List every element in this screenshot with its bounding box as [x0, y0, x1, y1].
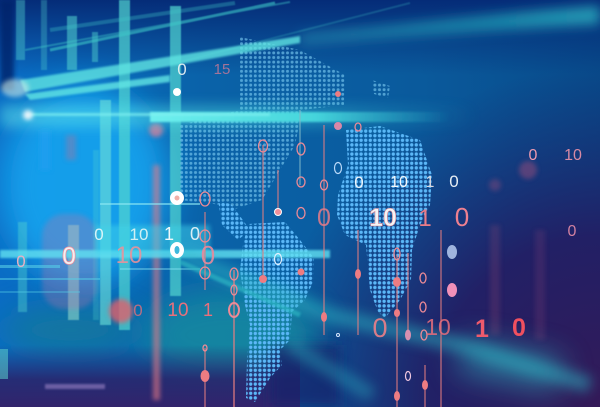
diagonal rack lines — [25, 2, 410, 62]
node circles — [200, 123, 427, 351]
horizontal light streaks — [0, 36, 480, 389]
blurred red glow blobs — [40, 123, 545, 400]
binary digits: 0 — [201, 240, 215, 270]
diagonal teal bands lower — [180, 255, 590, 395]
binary digits: 0 — [190, 224, 200, 244]
dotted world map — [180, 37, 432, 402]
binary digits: 10 — [369, 204, 397, 232]
binary digits: 0 — [354, 173, 364, 192]
binary digits: 10 — [167, 300, 189, 321]
top right light band — [300, 6, 600, 44]
server rack vertical bars — [16, 0, 181, 330]
binary digits: 10 — [130, 225, 148, 244]
binary digits: 0 — [133, 301, 143, 320]
binary digits: 0 — [317, 204, 331, 232]
binary digits: 0 — [177, 60, 187, 79]
africa — [337, 126, 432, 318]
binary digits: 15 — [214, 61, 230, 78]
binary digits: 0 — [449, 172, 459, 191]
binary digits: 0 — [94, 225, 104, 244]
binary digits: 10 — [116, 242, 142, 269]
binary digits: 0 — [529, 147, 538, 164]
south america — [240, 222, 314, 402]
binary digits — [16, 60, 582, 343]
binary digits: 0 — [372, 313, 388, 343]
binary digits: 0 — [16, 252, 26, 271]
north america — [180, 37, 345, 210]
binary digits: 10 — [425, 314, 451, 340]
binary digits: 0 — [455, 202, 469, 232]
binary digits: 0 — [512, 314, 526, 342]
binary digits: 10 — [390, 174, 408, 191]
binary digits: 1 — [418, 205, 432, 232]
greenland — [372, 80, 390, 98]
binary digits: 0 — [62, 243, 76, 270]
binary digits: 1 — [203, 300, 213, 320]
binary digits: 1 — [475, 315, 489, 343]
red connector pins — [205, 110, 441, 407]
binary digits: 0 — [568, 223, 577, 240]
binary digits: 1 — [164, 224, 174, 244]
binary digits: 10 — [564, 147, 582, 164]
binary digits: 1 — [426, 174, 435, 191]
central america — [218, 200, 250, 240]
